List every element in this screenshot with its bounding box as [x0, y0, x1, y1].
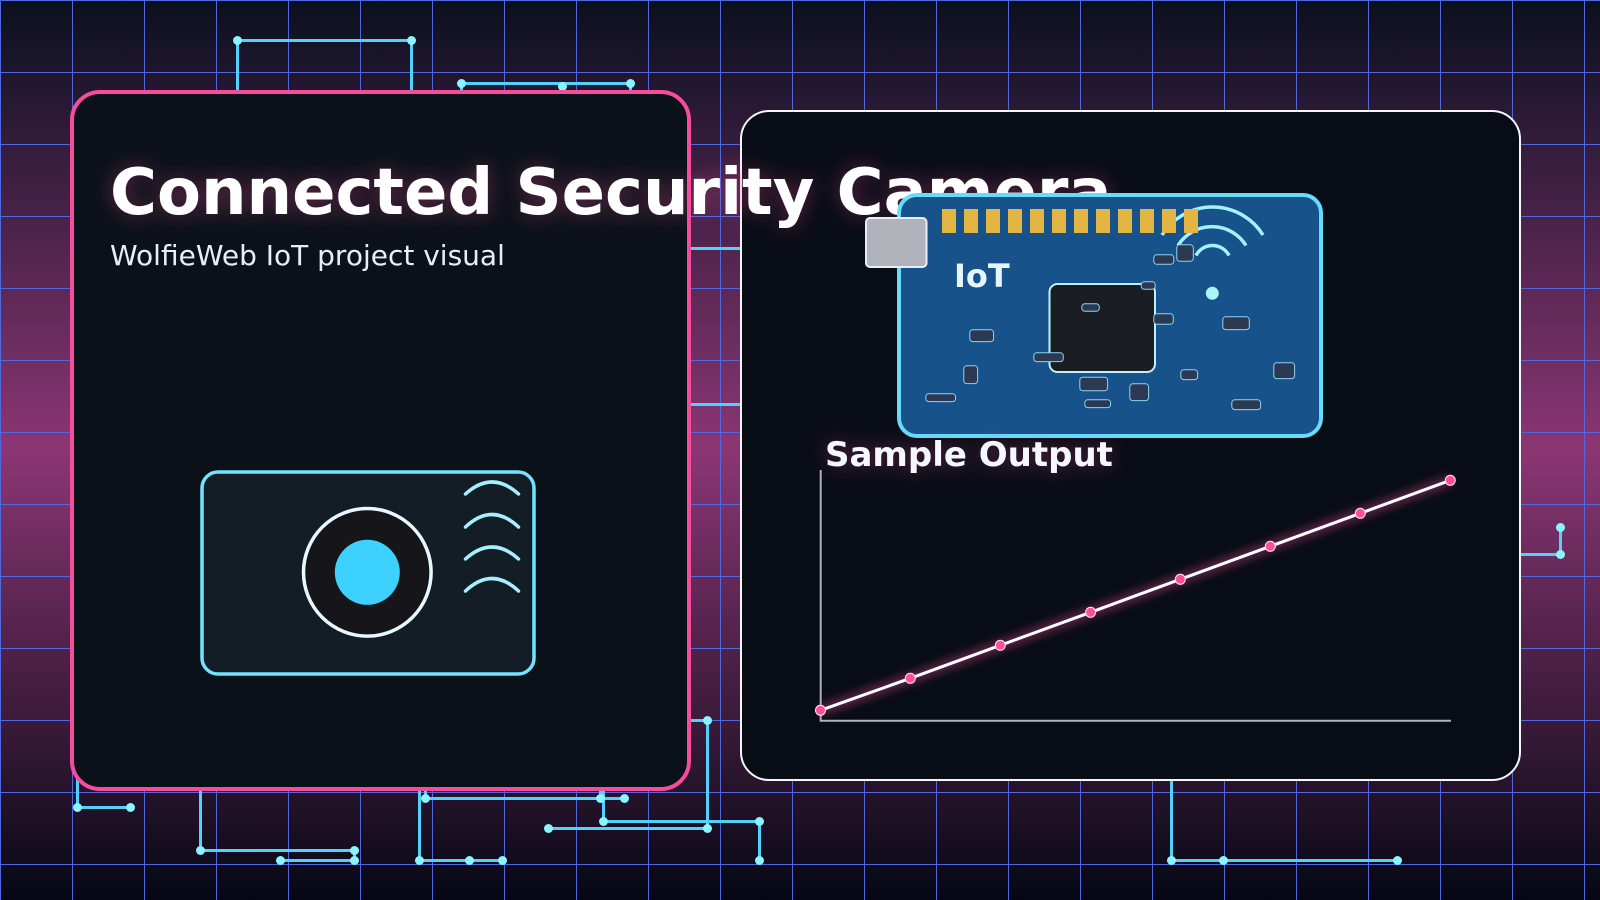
- panel: left camera card: [72, 92, 689, 789]
- IoT circuit board: [866, 195, 1321, 436]
- main chip: [1050, 284, 1155, 372]
- data line: [820, 480, 1450, 710]
- icon: security camera: [202, 472, 534, 674]
- line glow: [820, 480, 1450, 710]
- subtitle: WolfieWeb IoT project visual: [110, 239, 505, 272]
- title: Connected Security Camera: [110, 156, 1112, 230]
- grey connector block: [866, 218, 926, 267]
- camera signal arcs: [466, 482, 518, 591]
- board label: IoT: [954, 257, 1010, 295]
- camera lens: [304, 508, 431, 636]
- panel: right board and chart card: [741, 111, 1520, 780]
- chart heading: Sample Output: [825, 435, 1113, 475]
- data points: [816, 475, 1455, 715]
- small board components: [926, 245, 1295, 410]
- line chart: sample output: [816, 470, 1455, 721]
- icon: wifi signal: [1162, 207, 1263, 300]
- gold edge connector pads: [942, 209, 1198, 233]
- chart axes: [821, 470, 1451, 721]
